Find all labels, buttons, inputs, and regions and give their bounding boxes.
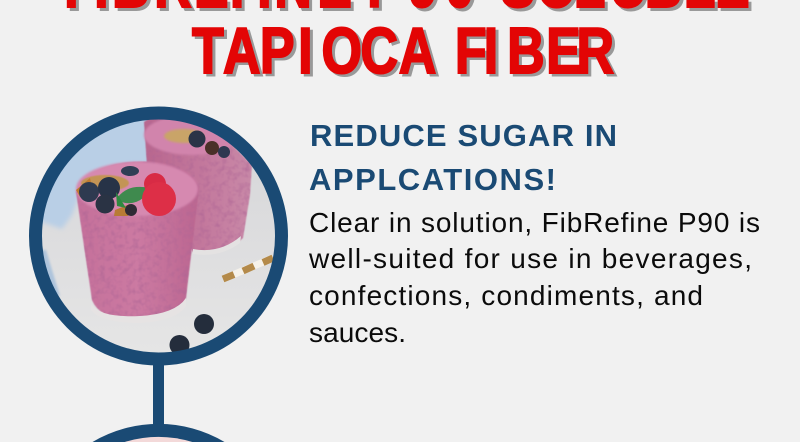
blue cloth — [43, 120, 147, 296]
photo circle: berry smoothies — [29, 105, 288, 365]
heading: REDUCE SUGAR IN — [310, 118, 617, 153]
raspberries — [144, 173, 166, 190]
title: TAPIOCA FIBER — [192, 16, 614, 87]
rear smoothie glass — [144, 115, 252, 255]
loose blueberries — [194, 314, 214, 334]
body text — [308, 207, 760, 348]
ring — [36, 113, 282, 359]
table surface — [94, 332, 223, 352]
title: TAPIOCA FIBER — [195, 18, 617, 90]
wafer straw — [232, 257, 266, 278]
body text: confections, condiments, and — [309, 280, 703, 311]
connector between circles — [153, 360, 164, 430]
body text: sauces. — [309, 317, 406, 348]
second circle (cropped) — [92, 424, 224, 442]
front smoothie glass — [76, 161, 199, 323]
heading — [309, 118, 617, 197]
body text: well-suited for use in beverages, — [308, 243, 752, 274]
heading: APPLCATIONS! — [309, 162, 556, 197]
toppings — [81, 175, 129, 191]
title — [64, 0, 753, 90]
body text: Clear in solution, FibRefine P90 is — [309, 207, 760, 238]
mint leaves — [118, 186, 146, 204]
